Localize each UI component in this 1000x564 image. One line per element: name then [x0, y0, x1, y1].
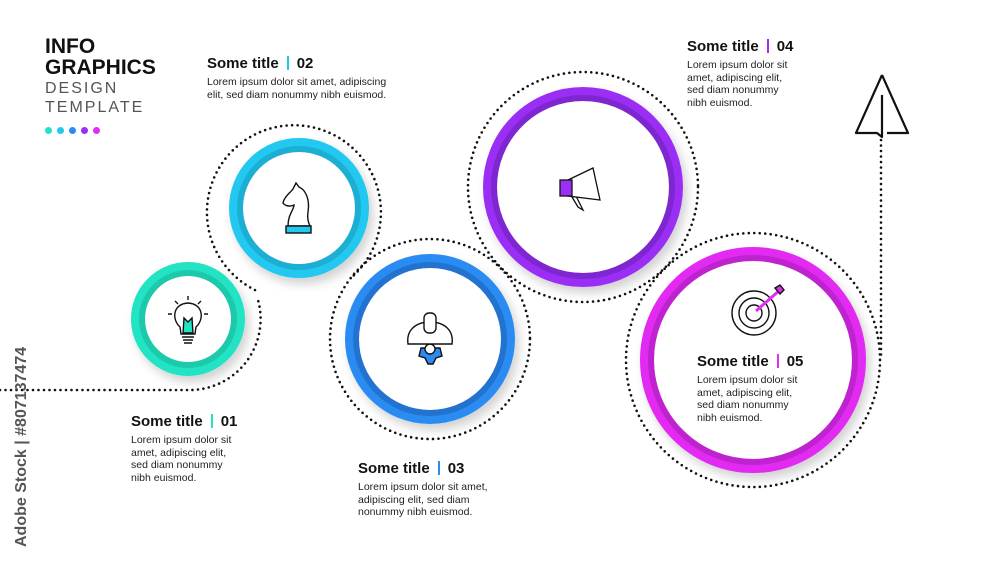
text 02: elit, sed diam nonummy nibh euismod. — [207, 88, 386, 100]
dotted path — [0, 72, 881, 487]
text 02: Lorem ipsum dolor sit amet, adipiscing — [207, 76, 386, 88]
icon: helmet gear — [408, 313, 452, 364]
text 02 — [207, 55, 386, 100]
icon: chess knight — [283, 183, 311, 233]
text 03: nonummy nibh euismod. — [358, 506, 472, 518]
text 01 — [131, 413, 237, 484]
text 05: Some title 05 — [697, 353, 803, 370]
circle 2 — [236, 145, 362, 271]
icon: target — [732, 285, 784, 335]
circle 4 — [490, 94, 676, 280]
icon: light bulb — [168, 296, 208, 343]
text 05: sed diam nonummy — [697, 399, 789, 411]
text 04: sed diam nonummy — [687, 84, 779, 96]
header: GRAPHICS — [45, 56, 156, 79]
text 01: sed diam nonummy — [131, 459, 223, 471]
text 03: Some title 03 — [358, 460, 464, 477]
text 03: Lorem ipsum dolor sit amet, — [358, 481, 488, 493]
header: TEMPLATE — [45, 99, 144, 116]
circle 3 — [352, 261, 508, 417]
text 03 — [358, 460, 488, 518]
text 04: nibh euismod. — [687, 96, 752, 108]
text 05: amet, adipiscing elit, — [697, 386, 792, 398]
text 01: amet, adipiscing elit, — [131, 446, 226, 458]
watermark text: Adobe Stock | #807137474 — [13, 347, 30, 547]
header: DESIGN — [45, 80, 118, 97]
text 05 — [697, 353, 803, 424]
text 04 — [687, 38, 794, 108]
text 03: adipiscing elit, sed diam — [358, 494, 469, 506]
header — [45, 35, 156, 134]
circle 5 — [647, 254, 859, 466]
circle 1 — [138, 269, 238, 369]
text 01: Lorem ipsum dolor sit — [131, 434, 231, 446]
text 01: nibh euismod. — [131, 472, 196, 484]
text 04: amet, adipiscing elit, — [687, 72, 782, 84]
icon: megaphone — [560, 168, 600, 210]
header: INFO — [45, 35, 95, 58]
text 05: nibh euismod. — [697, 412, 762, 424]
text 04: Lorem ipsum dolor sit — [687, 59, 787, 71]
text 04: Some title 04 — [687, 38, 793, 55]
text 02: Some title 02 — [207, 55, 313, 72]
text 01: Some title 01 — [131, 413, 237, 430]
text 05: Lorem ipsum dolor sit — [697, 374, 797, 386]
icon: paper plane — [856, 75, 908, 137]
